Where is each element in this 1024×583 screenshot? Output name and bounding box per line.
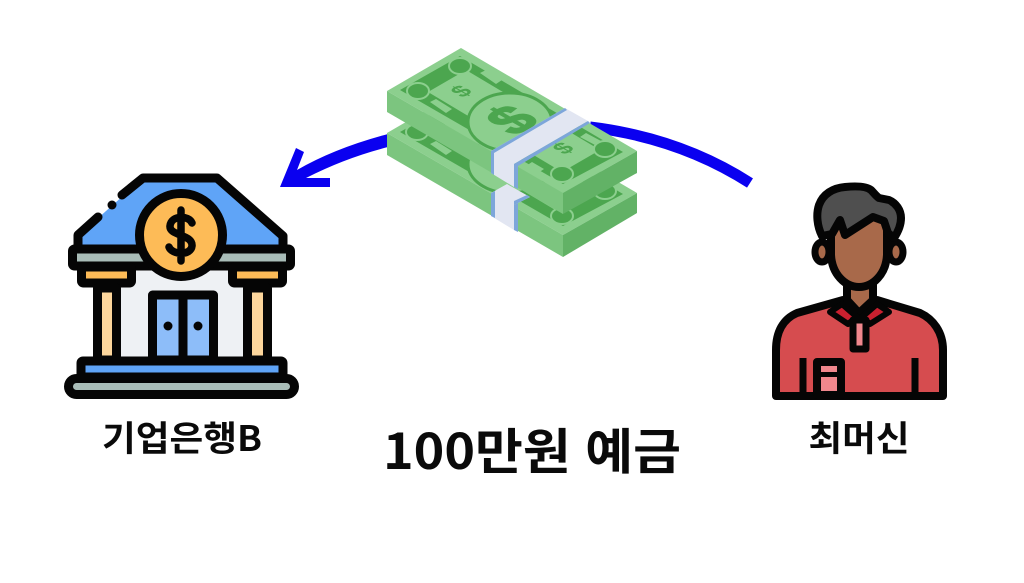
note corners bbox=[407, 83, 429, 99]
placket bbox=[853, 320, 866, 349]
columns bbox=[98, 288, 116, 360]
icon: stack of money bbox=[387, 48, 637, 257]
collar bbox=[830, 304, 857, 324]
note ticks bbox=[430, 99, 452, 113]
door bbox=[152, 295, 214, 360]
neck bbox=[847, 275, 873, 313]
roof bbox=[78, 178, 283, 248]
upper paper band bbox=[491, 108, 590, 189]
label: bank name: 기업은행B bbox=[102, 411, 262, 462]
sleeve lines bbox=[800, 358, 806, 394]
dollar coin bbox=[140, 194, 222, 276]
column capitals bbox=[82, 267, 132, 283]
icon: bank building bbox=[68, 178, 294, 394]
label: customer name: 최머신 bbox=[808, 411, 910, 462]
upper bundle: $ bbox=[546, 138, 580, 158]
arrow: customer to bills bbox=[590, 127, 750, 183]
small dollar glyphs: $ bbox=[444, 81, 478, 101]
shirt bbox=[776, 300, 943, 396]
hair bbox=[817, 186, 901, 238]
icon: customer person bbox=[776, 186, 943, 396]
label: deposit amount: 100만원 예금 bbox=[383, 413, 681, 484]
arrow: bills to bank bbox=[280, 134, 388, 187]
entablature bbox=[72, 249, 290, 266]
pocket bbox=[817, 362, 841, 395]
wall bbox=[118, 265, 246, 360]
lower paper band bbox=[491, 184, 530, 232]
lower bundle bbox=[387, 90, 637, 257]
upper bundle bbox=[387, 48, 637, 214]
central seal bbox=[468, 93, 552, 151]
ears bbox=[815, 242, 829, 262]
base bbox=[81, 361, 283, 377]
face bbox=[831, 205, 887, 287]
big dollar sign: $ bbox=[471, 96, 552, 143]
